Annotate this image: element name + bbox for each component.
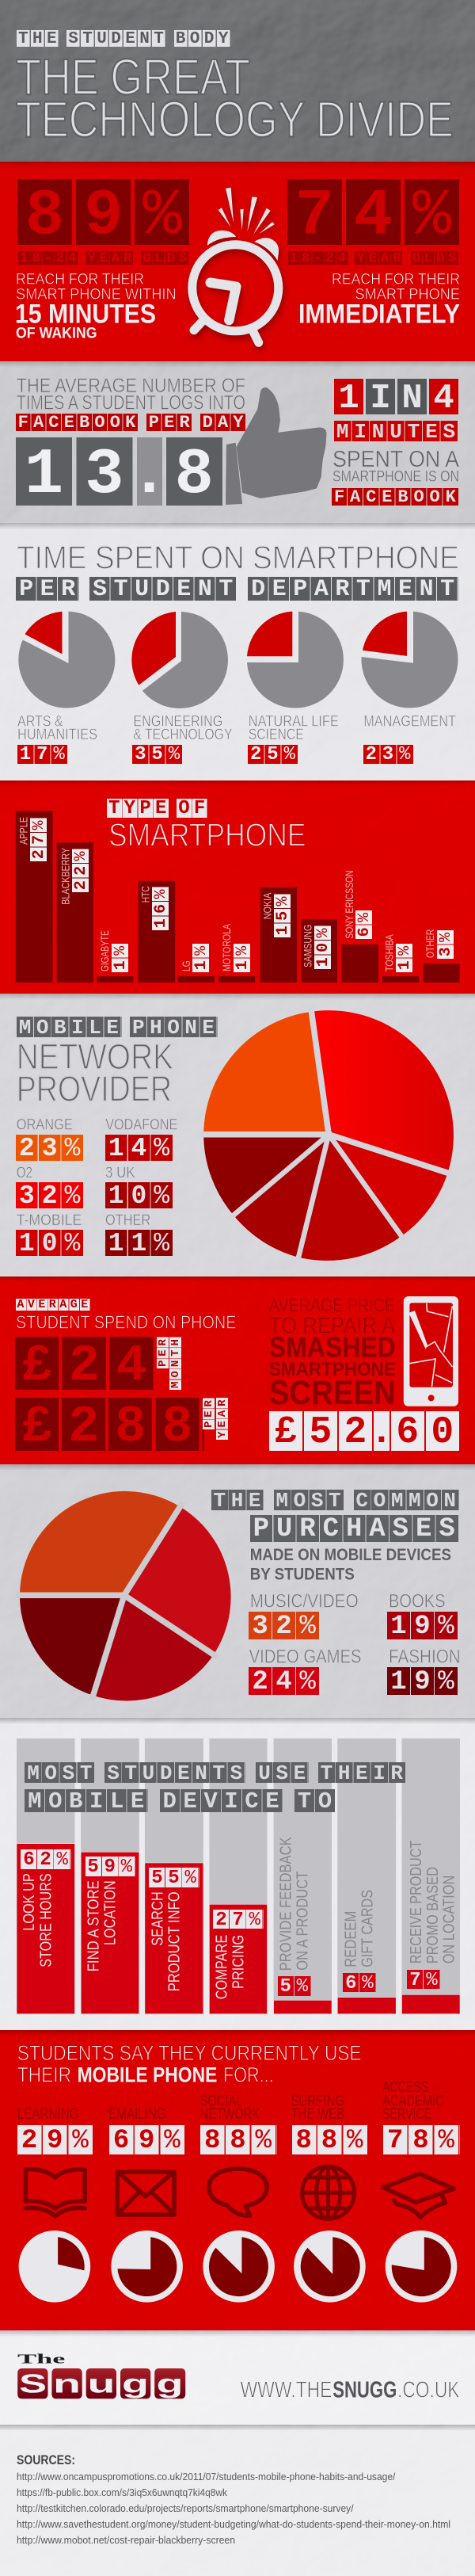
stat: motorola 1 percent: 1% [234, 941, 252, 970]
panel: sources [17, 2452, 450, 2546]
labels: activities on red bars: PRICING [229, 1935, 247, 1989]
heading tiles: the student body [17, 30, 233, 48]
stat: blackberry 22 percent: 22% [72, 846, 90, 890]
panel: what students use their mobile phone for [17, 2041, 464, 2303]
heading tiles: the student body: THE [18, 30, 61, 48]
heading tiles: average: AVERAGE [17, 1298, 92, 1311]
heading tiles: per student department: DEPARTMENT [251, 576, 462, 603]
pie: management [362, 612, 458, 708]
labels: uses: THE WEB [291, 2105, 344, 2123]
labels: activities on red bars [20, 1873, 247, 1999]
icon: book [25, 2170, 85, 2216]
labels: activities on red bars: LOOK UP [20, 1873, 38, 1931]
tiles: 1 in 4: 1 [338, 379, 370, 418]
pie: social network 88 percent [203, 2231, 275, 2303]
website address: .CO.UK [397, 2378, 459, 2403]
labels: activities on grey columns: PROMO BASED [424, 1867, 442, 1963]
tiles: 18-24 year olds right [288, 251, 461, 266]
stat: emailing 69 percent: 69% [113, 2126, 189, 2156]
labels: uses: NETWORK [200, 2105, 260, 2123]
big stat: 89 percent: 89% [25, 179, 201, 253]
labels: brand names: NOKIA [261, 892, 274, 919]
heading tiles: the most common: THE [214, 1489, 266, 1513]
tiles: 18-24 year olds left: OLDS [142, 251, 191, 266]
pie: academic service 78 percent [386, 2231, 457, 2303]
labels: activities on grey columns: GIFT CARDS [359, 1890, 377, 1967]
text: average price to repair a smashed smartphone screen: SMASHED [269, 1331, 396, 1364]
tiles: facebook: FACEBOOK [334, 487, 462, 507]
sources list: http://www.savethestudent.org/money/student-budgeting/what-do-students-spend-their-money-on.html [17, 2518, 450, 2530]
text: 89 percent reach within 15 minutes: OF WAKING [16, 324, 97, 342]
labels: activities on grey columns: RECEIVE PRODUCT [407, 1840, 425, 1963]
labels: activities on red bars: PRODUCT INFO [165, 1891, 184, 1991]
labels: brand names: SONY ERICSSON [343, 870, 355, 939]
labels: brand names: APPLE [17, 817, 29, 845]
labels: activities on grey columns: ON A PRODUCT [293, 1871, 311, 1971]
stat: vodafone 14 percent: 14% [108, 1134, 177, 1163]
heading: students say they currently use their mobile phone for: STUDENTS SAY THEY CURRENTLY USE [17, 2041, 362, 2065]
big stat: 52.60 pounds: 60 [396, 1411, 466, 1454]
heading tiles: mobile device to [25, 1788, 339, 1815]
tiles: 1 in 4: IN [370, 379, 433, 418]
stat: 55 percent: 55% [151, 1868, 202, 1889]
stat: 5 percent: 5% [279, 1976, 314, 1998]
big stat: 13.8: 13 [25, 438, 146, 512]
heading tiles: most students use their: THEIR [321, 1761, 408, 1785]
labels: activities on grey columns: REDEEM [342, 1911, 360, 1967]
text: made on mobile devices by students [250, 1546, 451, 1583]
tiles: facebook per day: PER [149, 413, 195, 433]
big stat: 288 pounds per year: £288 [21, 1398, 209, 1456]
pie: natural life science [247, 612, 344, 708]
panel: mobile phone network provider [16, 1010, 454, 1261]
labels: purchase categories: VIDEO GAMES [249, 1646, 362, 1667]
heading tiles: the student body: STUDENT [68, 30, 168, 48]
heading: students say they currently use their mobile phone for: THEIR [17, 2063, 71, 2087]
logo: the snugg [17, 2351, 185, 2399]
tiles: year: YEAR [216, 1396, 229, 1438]
tiles: facebook per day: DAY [203, 413, 249, 433]
logo: the snugg: S [19, 2369, 47, 2398]
stat: t-mobile 10 percent: 10% [19, 1229, 87, 1258]
stat: 7 percent: 7% [409, 1970, 443, 1991]
heading tiles: mobile phone: MOBILE [19, 1016, 124, 1040]
tiles: 18-24 year olds right: 18-24 [290, 251, 350, 266]
labels: brand names: SAMSUNG [301, 925, 314, 967]
title: THE GREAT [16, 48, 250, 105]
heading tiles: the most common: MOST [276, 1489, 346, 1513]
stat: lg 1 percent: 1% [192, 941, 211, 970]
labels: activities on red bars: LOCATION [101, 1880, 119, 1945]
stat: 23 percent: 23% [365, 744, 416, 765]
labels: brand names: GIGABYTE [98, 930, 111, 971]
tiles: minutes: MINUTES [336, 420, 461, 444]
labels: departments: HUMANITIES [17, 726, 97, 743]
tiles: 18-24 year olds right: OLDS [412, 251, 461, 266]
sources list: http://www.mobot.net/cost-repair-blackberry-screen [17, 2534, 235, 2546]
heading tiles: per student department: STUDENT [93, 576, 240, 603]
big stat: 13.8: . [130, 438, 155, 512]
text: average number of logins [17, 375, 245, 414]
text: 74 percent reach immediately [298, 270, 460, 329]
stat: music video 32 percent: 32% [252, 1612, 323, 1642]
pie: emailing 69 percent [111, 2231, 183, 2303]
heading: students say they currently use their mobile phone for: MOBILE PHONE [78, 2063, 217, 2087]
tiles: month: MONTH [169, 1335, 182, 1388]
stat: apple 27 percent: 27% [30, 815, 48, 859]
labels: brand names: MOTOROLA [220, 924, 233, 971]
big stat: 52.60 pounds: . [370, 1411, 387, 1454]
sources heading: SOURCES: [17, 2452, 75, 2467]
stat: orange 23 percent: 23% [19, 1134, 87, 1163]
labels: departments: MANAGEMENT [363, 712, 456, 730]
heading: students say they currently use their mobile phone for: FOR... [223, 2063, 274, 2087]
logo: the snugg: u [87, 2369, 116, 2398]
text: made on mobile devices by students: MADE ON MOBILE DEVICES [250, 1546, 451, 1564]
heading tiles: the most common [211, 1489, 462, 1513]
labels: brand names [17, 817, 436, 971]
big stat: 74 percent: 74% [295, 179, 471, 253]
stat: 62 percent: 62% [23, 1849, 74, 1871]
icon: ringing alarm clock [192, 188, 279, 342]
labels: providers: O2 [17, 1164, 32, 1181]
panel: student spend and repair cost [15, 1295, 466, 1456]
stat: nokia 15 percent: 15% [274, 891, 292, 935]
panel: time spent per department [16, 539, 462, 765]
bar chart: grey column backgrounds [17, 1738, 460, 2014]
website address [241, 2378, 459, 2403]
heading: network provider: PROVIDER [17, 1068, 172, 1109]
pie chart: network share [200, 1007, 454, 1261]
tiles: 18-24 year olds left: YEAR [87, 251, 135, 266]
tiles: facebook per day [16, 413, 249, 433]
big stat: 24 pounds per month: £24 [21, 1337, 163, 1395]
heading: smartphone: SMARTPHONE [108, 817, 306, 853]
text: average price to repair a smashed smartphone screen: SMARTPHONE [269, 1359, 396, 1380]
text: 74 percent reach immediately: SMART PHONE [355, 285, 460, 303]
panel: most common purchases [20, 1489, 462, 1700]
labels: uses: SURFING [291, 2092, 344, 2109]
heading tiles: mobile phone: PHONE [132, 1016, 220, 1040]
heading: network provider [17, 1036, 173, 1109]
stat: 3 uk 10 percent: 10% [108, 1181, 177, 1211]
big stat: 13.8 [16, 437, 235, 512]
stat: 27 percent: 27% [215, 1910, 266, 1931]
title [16, 48, 454, 147]
labels: activities on grey columns: PROVIDE FEEDBACK [276, 1837, 294, 1971]
heading tiles: the most common: COMMON [355, 1489, 462, 1513]
tiles: per: PER [157, 1335, 169, 1367]
text: 74 percent reach immediately: REACH FOR THEIR [332, 270, 460, 288]
heading tiles: mobile phone [17, 1016, 220, 1040]
sources list: https://fb-public.box.com/s/3iq5x6uwnqtq7ki4q8wk [17, 2486, 227, 2498]
stat: sony ericsson 6 percent: 6% [355, 907, 374, 937]
big stat: 52.60 pounds [269, 1411, 466, 1454]
labels: purchase categories: FASHION [389, 1646, 461, 1667]
text: average price to repair a smashed smartphone screen: AVERAGE PRICE [269, 1295, 395, 1315]
text: made on mobile devices by students: BY STUDENTS [250, 1565, 355, 1583]
stat: o2 32 percent: 32% [19, 1181, 87, 1211]
heading tiles: mobile device to: TO [298, 1788, 339, 1815]
heading tiles: per student department: PER [19, 576, 82, 603]
stat: social network 88 percent: 88% [204, 2126, 281, 2156]
text: 89 percent reach within 15 minutes: REACH FOR THEIR [16, 270, 144, 288]
labels: uses: ACADEMIC [382, 2092, 444, 2109]
panel: header [16, 30, 454, 147]
labels: providers: 3 UK [105, 1164, 135, 1181]
pie: surfing the web 88 percent [294, 2231, 366, 2303]
panel: logo and website [17, 2351, 459, 2403]
labels: providers: ORANGE [17, 1116, 73, 1134]
bar chart: red values [17, 1844, 460, 2014]
website address: WWW.THE [241, 2378, 332, 2403]
labels: uses: SOCIAL [200, 2092, 242, 2109]
heading tiles: purchases: PURCHASES [253, 1514, 462, 1544]
heading tiles: the student body: BODY [176, 30, 233, 48]
logo: the snugg: g [157, 2369, 184, 2398]
heading tiles: most students use their: STUDENTS [107, 1761, 248, 1785]
bar chart: brands [16, 811, 460, 983]
icon: envelope [117, 2172, 174, 2215]
stat: 59 percent: 59% [87, 1857, 138, 1878]
labels: uses: SERVICE [382, 2105, 431, 2123]
pie: engineering and technology [131, 612, 228, 708]
labels: departments: ENGINEERING [133, 712, 222, 730]
labels: brand names: BLACKBERRY [59, 848, 71, 905]
stat: learning 29 percent: 29% [21, 2126, 97, 2156]
labels: purchase categories: BOOKS [389, 1590, 446, 1612]
heading: student spend on phone: STUDENT SPEND ON PHONE [16, 1312, 236, 1333]
sources list: http://testkitchen.colorado.edu/projects/reports/smartphone/smartphone-survey/ [17, 2502, 354, 2514]
tiles: 1 in 4: 4 [433, 379, 465, 418]
pie: learning 29 percent [19, 2231, 90, 2303]
heading tiles: most students use their: USE [258, 1761, 311, 1785]
labels: departments: SCIENCE [249, 726, 304, 743]
labels: purchase categories [249, 1590, 461, 1667]
sources list: http://www.oncampuspromotions.co.uk/2011/07/students-mobile-phone-habits-and-usage/ [17, 2471, 396, 2483]
pie: arts and humanities [18, 612, 115, 708]
big stat: 52.60 pounds: £52 [274, 1411, 379, 1454]
labels: providers: T-MOBILE [17, 1212, 82, 1229]
text: 89 percent reach within 15 minutes [15, 270, 177, 342]
text: average price to repair a smashed smartphone screen [269, 1295, 396, 1412]
labels: providers: VODAFONE [105, 1116, 177, 1134]
text: spent on a smartphone is on: SPENT ON A [332, 447, 460, 472]
text: average price to repair a smashed smartphone screen: SCREEN [269, 1374, 396, 1412]
tiles: per: PER [203, 1396, 215, 1428]
heading: students say they currently use their mobile phone for [17, 2041, 362, 2087]
labels: departments: ARTS & [17, 712, 63, 730]
stat: fashion 19 percent: 19% [390, 1667, 462, 1697]
labels: activities on grey columns [276, 1837, 458, 1971]
text: average number of logins: TIMES A STUDENT LOGS INTO [17, 391, 245, 414]
stat: gigabyte 1 percent: 1% [111, 941, 130, 970]
labels: brand names: HTC [139, 886, 152, 903]
text: 74 percent reach immediately: IMMEDIATELY [298, 299, 460, 329]
logo: the snugg: g [122, 2369, 149, 2398]
stat: 25 percent: 25% [250, 744, 301, 765]
heading tiles: most students use their [25, 1761, 408, 1785]
heading tiles: type of [107, 798, 210, 819]
labels: uses: LEARNING [17, 2105, 78, 2123]
labels: uses [17, 2078, 444, 2123]
labels: activities on grey columns: ON LOCATION [439, 1876, 458, 1963]
labels: activities on red bars: SEARCH [149, 1891, 166, 1946]
tiles: 18-24 year olds left [18, 251, 191, 266]
labels: activities on red bars: COMPARE [212, 1935, 230, 1999]
labels: providers: OTHER [105, 1212, 150, 1229]
stat: other 11 percent: 11% [108, 1229, 177, 1258]
panel: how students use mobile devices [17, 1738, 460, 2014]
icon: globe [302, 2166, 355, 2219]
stat: academic service 78 percent: 78% [387, 2126, 464, 2156]
logo: the snugg: n [53, 2369, 81, 2398]
heading tiles: mobile device to: MOBILE [28, 1788, 151, 1815]
heading tiles: per student department [16, 576, 462, 603]
stat: 6 percent: 6% [345, 1973, 378, 1994]
labels: brand names: LG [180, 960, 192, 971]
stat: other 3 percent: 3% [437, 927, 454, 956]
icon: thumbs up [226, 387, 326, 505]
labels: departments [17, 712, 456, 743]
text: 89 percent reach within 15 minutes: SMART PHONE WITHIN [16, 285, 177, 303]
stat: samsung 10 percent: 10% [314, 923, 332, 967]
big stat: 13.8: 8 [175, 438, 235, 512]
pie chart: purchases [16, 1491, 231, 1701]
tiles: 18-24 year olds right: YEAR [357, 251, 405, 266]
panel: type of smartphone [16, 798, 460, 983]
labels: departments: & TECHNOLOGY [133, 726, 233, 743]
website address: SNUGG [332, 2378, 397, 2403]
text: average price to repair a smashed smartphone screen: TO REPAIR A [269, 1314, 396, 1339]
icon: smashed smartphone [404, 1296, 458, 1406]
labels: departments: NATURAL LIFE [249, 712, 339, 730]
stat: toshiba 1 percent: 1% [396, 941, 414, 970]
stat: surfing the web 88 percent: 88% [296, 2126, 372, 2156]
labels: activities on red bars: STORE HOURS [36, 1873, 55, 1967]
stat: books 19 percent: 19% [390, 1612, 462, 1642]
heading tiles: type of: OF [178, 798, 210, 819]
icon: graduation cap [383, 2173, 454, 2217]
heading: network provider: NETWORK [17, 1036, 173, 1077]
stat: 17 percent: 17% [20, 744, 70, 765]
stat: 35 percent: 35% [135, 744, 185, 765]
heading tiles: type of: TYPE [108, 798, 171, 819]
labels: activities on red bars: FIND A STORE [84, 1880, 102, 1971]
sources list [17, 2471, 450, 2546]
heading tiles: mobile device to: DEVICE [162, 1788, 286, 1815]
panel: facebook [16, 375, 465, 512]
panel: waking stats [15, 179, 471, 353]
text: spent on a smartphone is on [332, 447, 460, 485]
logo: the snugg: The [17, 2351, 66, 2366]
labels: brand names: OTHER [424, 929, 436, 958]
labels: uses: EMAILING [108, 2105, 166, 2123]
text: average number of logins: THE AVERAGE NUMBER OF [17, 375, 245, 397]
icon: speech bubble [209, 2169, 267, 2215]
heading tiles: most students use their: MOST [27, 1761, 97, 1785]
tiles: 1 in 4 [334, 379, 465, 418]
stat: video games 24 percent: 24% [252, 1667, 323, 1697]
labels: purchase categories: MUSIC/VIDEO [250, 1590, 359, 1612]
tiles: facebook per day: FACEBOOK [18, 413, 140, 433]
labels: uses: ACCESS [382, 2078, 429, 2096]
labels: brand names: TOSHIBA [382, 934, 395, 971]
text: 89 percent reach within 15 minutes: 15 MINUTES [15, 299, 156, 329]
tiles: 18-24 year olds left: 18-24 [20, 251, 80, 266]
stat: htc 16 percent: 16% [152, 884, 170, 929]
labels: providers [17, 1116, 177, 1229]
